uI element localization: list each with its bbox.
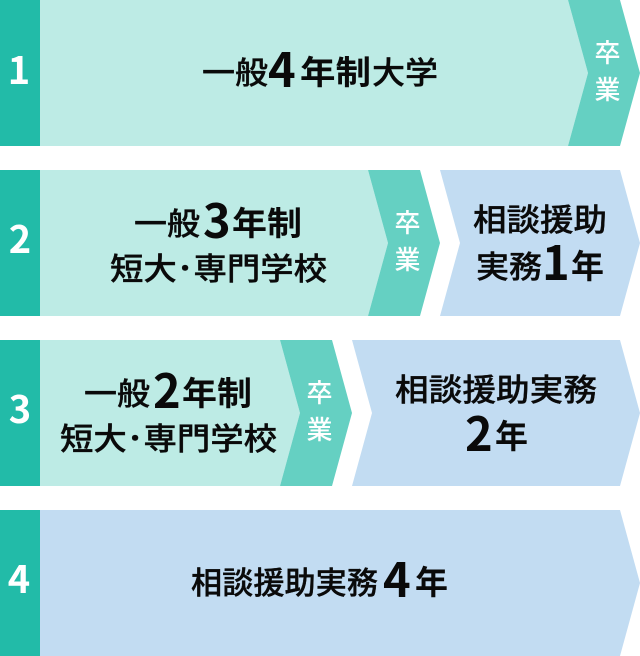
row 2: 3-year college: [0, 170, 640, 316]
graduation arrow: 卒: [594, 33, 621, 70]
graduation arrow: [568, 0, 640, 146]
row 4: 4 years of practice: [0, 510, 640, 656]
practice panel: 1 year: 年: [571, 240, 604, 288]
number tab 1: 1: [8, 40, 30, 95]
study panel: 4-year university: 年制: [300, 46, 371, 94]
graduation arrow: 業: [394, 240, 421, 277]
practice panel: 1 year: 実務: [476, 242, 542, 287]
study panel: 2-year / junior college: 一般: [84, 369, 150, 414]
row 3: 2-year college: [0, 340, 640, 486]
number tab 1: [0, 0, 40, 146]
practice panel: 1 year: [440, 170, 640, 316]
practice panel: 2 years: 2: [465, 396, 493, 465]
number tab 4: 4: [8, 549, 30, 604]
study panel: 3-year / junior college: 一般: [134, 199, 200, 244]
practice panel: 1 year: 相談援助: [473, 195, 607, 240]
number tab 2: [0, 170, 40, 316]
study panel: 4-year university: 大学: [372, 48, 438, 93]
practice panel: 2 years: 相談援助実務: [395, 365, 597, 410]
study panel: 3-year / junior college: 3: [203, 183, 231, 252]
practice panel: 1 year: 1: [542, 225, 570, 294]
study panel: 4-year university: 4: [268, 32, 296, 101]
study panel: 3-year / junior college: 短大･専門学校: [110, 244, 327, 289]
graduation arrow: 業: [306, 410, 333, 447]
number tab 3: [0, 340, 40, 486]
number tab 2: 2: [9, 209, 31, 264]
practice panel: 4 years: 相談援助実務: [191, 558, 378, 603]
study panel: 2-year / junior college: [40, 340, 300, 486]
practice panel: 2 years: 年: [495, 410, 528, 458]
practice panel: 4 years: 年: [415, 556, 448, 604]
study panel: 4-year university: 一般: [202, 48, 268, 93]
practice panel: 4 years: [40, 510, 640, 656]
practice panel: 2 years: [352, 340, 640, 486]
number tab 4: [0, 510, 40, 656]
graduation arrow: 卒: [394, 203, 421, 240]
study panel: 2-year / junior college: 年制: [182, 367, 252, 415]
study panel: 2-year / junior college: 短大･専門学校: [60, 414, 277, 459]
number tab 3: 3: [9, 379, 31, 434]
study panel: 3-year / junior college: [40, 170, 388, 316]
graduation arrow: 卒: [306, 373, 333, 410]
graduation arrow: [280, 340, 352, 486]
study panel: 2-year / junior college: 2: [153, 353, 181, 422]
practice panel: 4 years: 4: [383, 542, 411, 611]
row 1: 4-year university: [0, 0, 640, 146]
graduation arrow: 業: [594, 70, 621, 107]
study panel: 4-year university: [40, 0, 588, 146]
graduation arrow: [368, 170, 440, 316]
study panel: 3-year / junior college: 年制: [232, 197, 302, 245]
